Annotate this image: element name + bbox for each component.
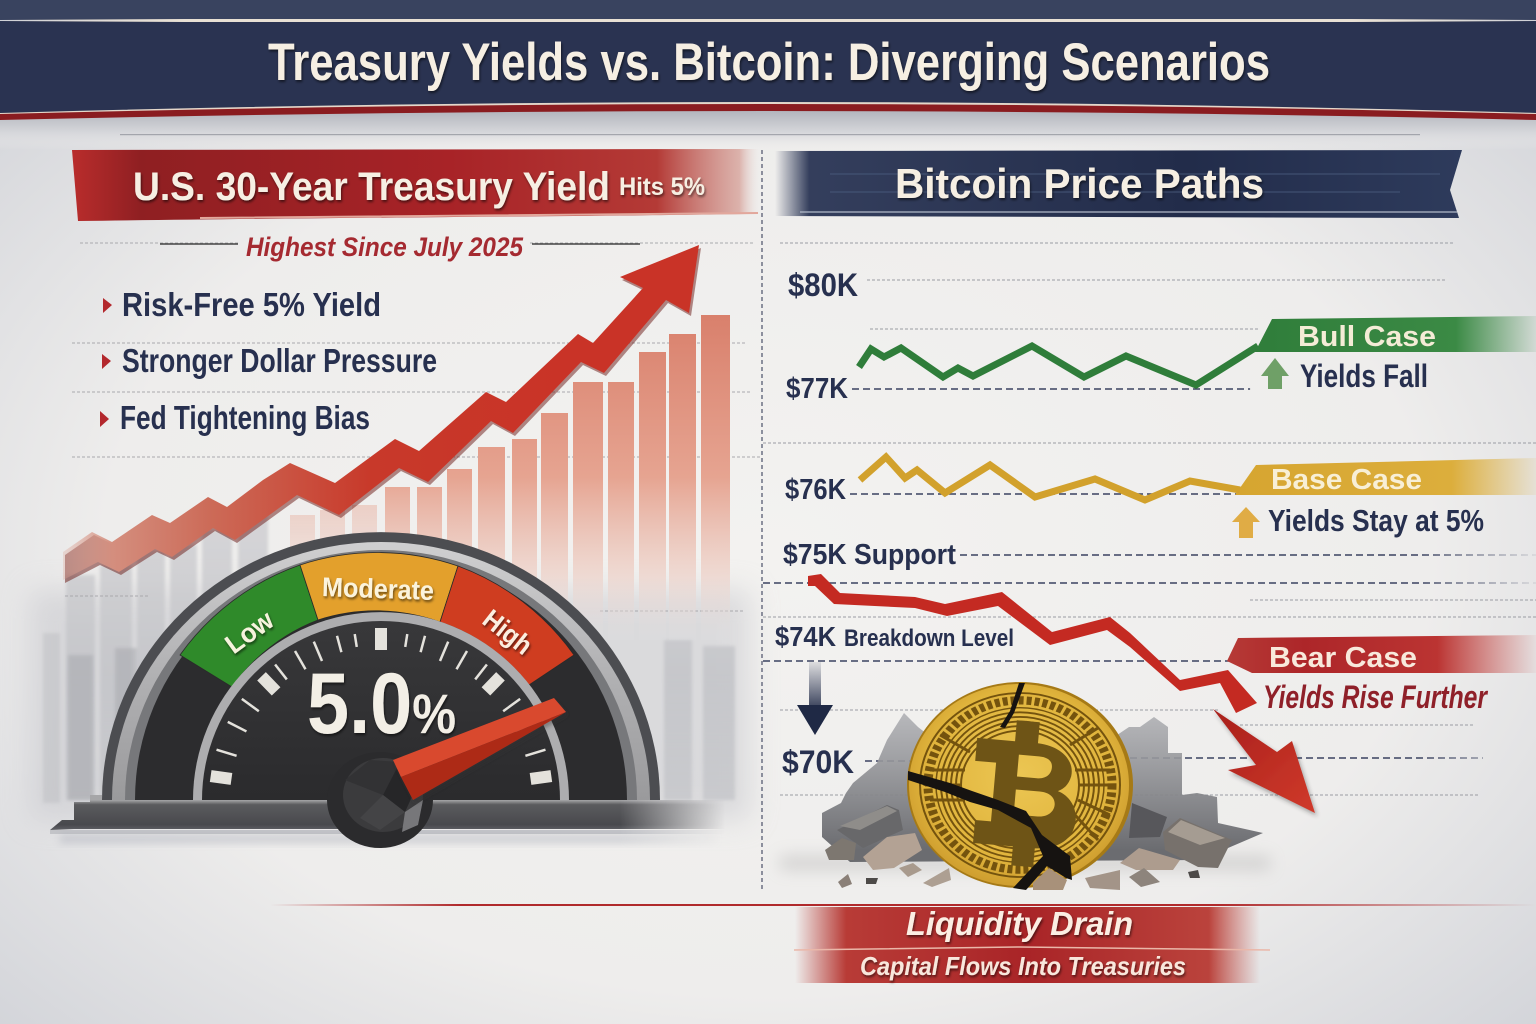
price labels: $76K — [785, 474, 846, 506]
bullet 1: Risk-Free 5% Yield — [122, 286, 381, 323]
bottom rule — [270, 904, 1536, 906]
down arrow — [797, 662, 833, 735]
icon: green up arrow — [1261, 358, 1289, 389]
bull label: Bull Case — [1298, 321, 1436, 353]
subheading: Highest Since July 2025 — [246, 232, 524, 262]
rocks — [825, 803, 1232, 890]
heading banner — [72, 149, 760, 221]
bullet list — [100, 286, 437, 436]
liquidity subheading: Capital Flows Into Treasuries — [860, 951, 1186, 981]
base label: Base Case — [1271, 464, 1422, 496]
icon: bitcoin symbol — [966, 717, 1084, 871]
price labels: $80K — [788, 267, 858, 303]
gauge — [50, 532, 730, 848]
rising bar chart — [290, 315, 730, 640]
rubble and broken bitcoin — [780, 682, 1270, 890]
price labels: $77K — [786, 373, 848, 405]
price grid lines — [763, 243, 1536, 795]
rock under coin — [1033, 868, 1067, 890]
price dashed levels — [763, 389, 1536, 761]
panel divider — [761, 150, 763, 892]
gauge zones — [180, 553, 574, 687]
price labels: $74K — [775, 621, 836, 652]
bear line — [808, 574, 1257, 713]
base case — [860, 457, 1536, 538]
base banner — [1235, 458, 1536, 495]
heading banner — [775, 150, 1462, 218]
needle — [393, 698, 566, 800]
base condition: Yields Stay at 5% — [1268, 503, 1484, 538]
coin cracks — [908, 683, 1072, 890]
gauge value: 5.0% — [307, 657, 456, 752]
zone: moderate — [300, 553, 458, 622]
liquidity drain banner — [794, 905, 1270, 983]
coin engraved rings — [920, 693, 1120, 877]
haze behind gauge — [30, 590, 750, 820]
panel: treasury yield — [30, 149, 760, 848]
heading text: Bitcoin Price Paths — [895, 160, 1264, 207]
darker low bars — [43, 633, 137, 803]
dial — [193, 612, 569, 800]
ground shadow — [780, 856, 1270, 870]
price labels: $70K — [782, 744, 854, 780]
base line — [860, 457, 1240, 500]
price labels — [775, 267, 1014, 780]
zone labels: Moderate — [322, 572, 435, 606]
bull banner — [1255, 316, 1536, 352]
gauge rim — [102, 532, 660, 800]
heading text: Hits 5% — [619, 173, 705, 201]
header band — [0, 0, 1536, 150]
gauge ticks — [211, 628, 551, 779]
dashed grid lines — [65, 243, 760, 611]
bear banner — [1227, 635, 1536, 673]
subheading rules — [160, 243, 640, 245]
bull case — [859, 316, 1536, 394]
gauge base — [50, 795, 730, 843]
zone: low — [180, 565, 318, 687]
bullet 3: Fed Tightening Bias — [120, 399, 370, 436]
rising arrow — [63, 245, 701, 583]
bear label: Bear Case — [1269, 642, 1417, 674]
coin circuit lines — [925, 728, 1115, 840]
bear case — [808, 574, 1536, 813]
faded gray bars — [66, 510, 735, 800]
coin — [907, 682, 1133, 890]
price labels: $75K Support — [783, 539, 956, 571]
heading text: U.S. 30-Year Treasury Yield — [133, 165, 610, 209]
price labels: Breakdown Level — [844, 625, 1014, 652]
bull condition: Yields Fall — [1300, 358, 1428, 394]
bear arrow — [1213, 709, 1315, 813]
skyline silhouette — [822, 713, 1263, 862]
zone: high — [440, 566, 574, 685]
liquidity heading: Liquidity Drain — [906, 905, 1133, 942]
zone labels — [220, 572, 538, 661]
panel: bitcoin price paths — [763, 150, 1536, 890]
title: Treasury Yields vs. Bitcoin: Diverging Scenarios — [268, 33, 1270, 92]
zone labels: Low — [220, 604, 280, 660]
gauge hub — [327, 752, 433, 848]
zone labels: High — [477, 604, 538, 661]
icon: yellow up arrow — [1232, 507, 1260, 538]
bullet 2: Stronger Dollar Pressure — [122, 342, 437, 379]
bull line — [859, 346, 1258, 385]
